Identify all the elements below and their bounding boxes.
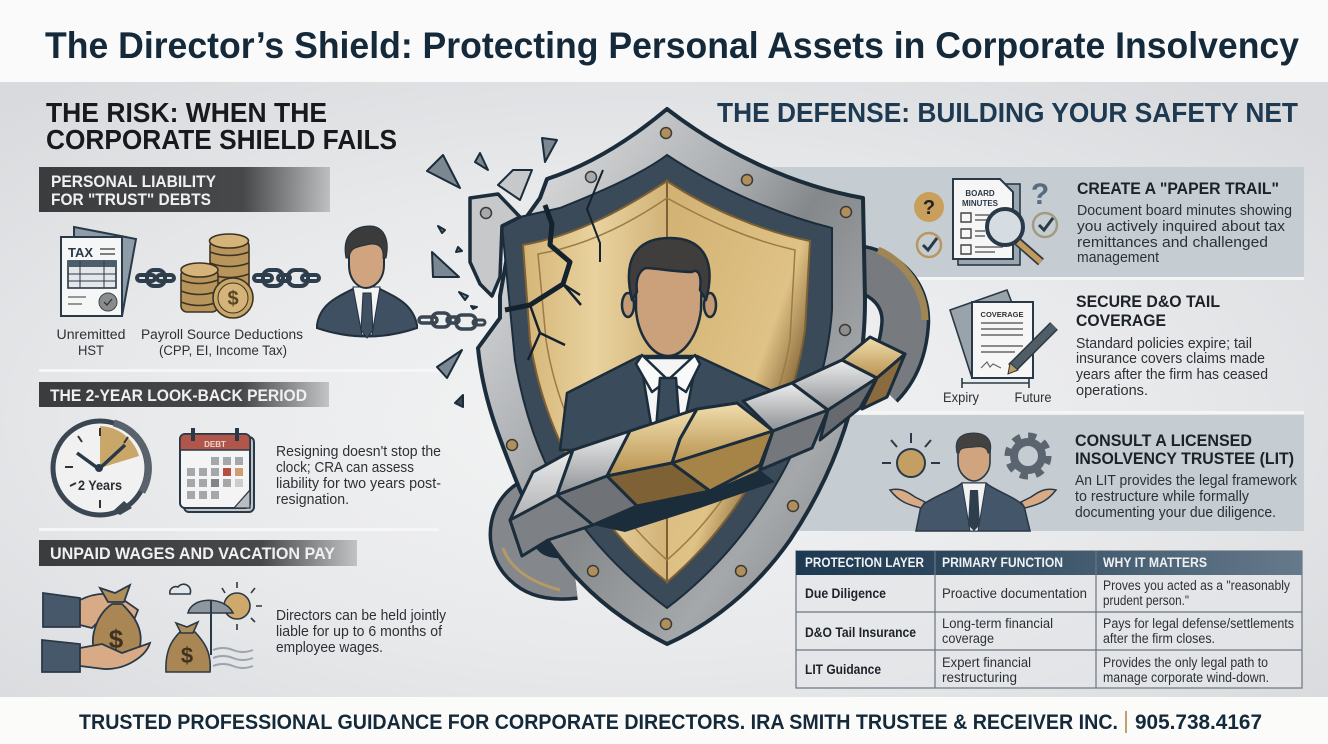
icon: board minutes with magnifier: BOARD	[965, 189, 995, 198]
panel: licensed insolvency trustee	[780, 415, 1304, 531]
heading: tail coverage: SECURE D&O TAIL	[1076, 293, 1220, 311]
text: directors	[276, 608, 447, 656]
label: unremitted HST: HST	[78, 343, 104, 358]
icon: tax document: TAX	[68, 245, 93, 260]
panel: the risk	[39, 97, 447, 672]
director in shield	[560, 238, 795, 450]
table row: D&O tail insurance: Pays for legal defense/settlements	[1103, 616, 1294, 631]
text: paper trail: you actively inquired about tax	[1077, 219, 1286, 235]
icon: tax document	[61, 227, 136, 316]
text: tail coverage: Standard policies expire; tail	[1076, 336, 1252, 352]
footer divider	[1125, 711, 1127, 733]
text: resigning: resignation.	[276, 492, 349, 508]
table row: D&O tail insurance: Long-term financial	[942, 616, 1053, 631]
heading: LIT	[1075, 432, 1294, 468]
icon: calendar	[180, 428, 254, 512]
table row: D&O tail insurance: coverage	[942, 631, 994, 646]
text: tail coverage: insurance covers claims made	[1076, 351, 1265, 367]
text: LIT: documenting your due diligence.	[1075, 505, 1276, 521]
icon: hands passing money bag: $	[109, 624, 124, 654]
label: unremitted HST	[56, 327, 126, 358]
text: resigning: clock; CRA can assess	[276, 460, 414, 476]
text: resigning: Resigning doesn't stop the	[276, 444, 441, 460]
title: The Director’s Shield: Protecting Personal Assets in Corporate Insolvency	[45, 25, 1299, 66]
table row: due diligence: Proactive documentation	[942, 586, 1087, 601]
table header: WHY IT MATTERS	[1103, 555, 1207, 570]
banner: personal liability	[39, 167, 330, 212]
table header: PROTECTION LAYER	[805, 555, 924, 570]
table row: LIT guidance: LIT Guidance	[805, 662, 881, 677]
icon: director figure	[317, 226, 417, 338]
table row: LIT guidance: Provides the only legal path to	[1103, 655, 1268, 670]
text: paper trail: Document board minutes showing	[1077, 203, 1292, 219]
heading: tail coverage	[1076, 293, 1220, 330]
banner: personal liability: PERSONAL LIABILITY	[51, 173, 216, 191]
table row: D&O tail insurance: after the firm closes.	[1103, 631, 1215, 646]
table header	[796, 551, 1302, 575]
icon: board minutes with magnifier: ?	[1031, 178, 1049, 211]
icon: board minutes with magnifier: ?	[923, 197, 935, 219]
table row: due diligence: Proves you acted as a "reasonably	[1103, 578, 1290, 593]
text: directors: liable for up to 6 months of	[276, 624, 443, 640]
icon: policy document and pen: COVERAGE	[981, 310, 1023, 319]
footer text: TRUSTED PROFESSIONAL GUIDANCE FOR CORPORATE DIRECTORS. IRA SMITH TRUSTEE & RECEIVER INC.	[79, 711, 1118, 734]
icon: hands passing money bag	[42, 585, 150, 672]
icon: chain link two	[254, 270, 319, 286]
table row: due diligence: prudent person."	[1103, 593, 1189, 608]
table header: PRIMARY FUNCTION	[942, 555, 1063, 570]
label: future: Future	[1014, 390, 1052, 405]
icon: coin stacks: $	[227, 288, 239, 310]
heading: LIT: INSOLVENCY TRUSTEE (LIT)	[1075, 450, 1294, 468]
table: protection layers	[796, 551, 1302, 688]
banner: look-back period: THE 2-YEAR LOOK-BACK PERIOD	[50, 387, 307, 405]
heading: paper trail: CREATE A "PAPER TRAIL"	[1077, 180, 1279, 198]
text: directors: employee wages.	[276, 640, 383, 656]
banner: look-back period	[39, 382, 329, 407]
footer band	[0, 697, 1328, 744]
heading: the defense: THE DEFENSE: BUILDING YOUR SAFETY NET	[717, 97, 1298, 128]
panel: the defense	[717, 97, 1304, 688]
icon: coin stacks	[181, 234, 253, 318]
shield: steel rim	[478, 109, 865, 644]
icon: trustee with sun and gear	[882, 433, 1056, 531]
banner: personal liability: FOR "TRUST" DEBTS	[51, 191, 211, 209]
heading: tail coverage: COVERAGE	[1076, 312, 1166, 330]
icon: chain link one	[137, 270, 174, 286]
banner: unpaid wages	[39, 540, 357, 566]
table row: D&O tail insurance	[805, 616, 1294, 646]
wrap: rear loop	[503, 250, 925, 590]
text: LIT	[1075, 473, 1298, 521]
icon: calendar: DEBT	[204, 440, 226, 449]
panel: tail coverage	[780, 290, 1304, 414]
heading: LIT: CONSULT A LICENSED	[1075, 432, 1252, 450]
text: paper trail: management	[1077, 250, 1159, 266]
table row: LIT guidance: manage corporate wind-down.	[1103, 670, 1269, 685]
shield: dark inner band	[502, 155, 832, 608]
text: directors: Directors can be held jointly	[276, 608, 447, 624]
footer phone: 905.738.4167	[1135, 711, 1262, 734]
table row: LIT guidance: restructuring	[942, 670, 1017, 685]
label: payroll source deductions: Payroll Source Deductions	[141, 327, 303, 342]
text: LIT: to restructure while formally	[1075, 489, 1250, 505]
text: resigning: liability for two years post-	[276, 476, 441, 492]
text: paper trail: remittances and challenged	[1077, 235, 1268, 251]
icon: clock	[53, 421, 148, 515]
icon: vacation pay bag and umbrella: $	[181, 643, 193, 668]
shield: rivets	[480, 128, 852, 630]
heading: the risk	[46, 97, 397, 155]
table row: LIT guidance	[805, 655, 1269, 685]
chain to broken shield	[419, 313, 485, 329]
panel: paper trail	[763, 167, 1304, 280]
table row: due diligence	[805, 578, 1290, 608]
wrap: front band	[510, 337, 905, 556]
shield: cracks	[505, 170, 603, 360]
label: unremitted HST: Unremitted	[56, 327, 126, 342]
icon: clock: 2 Years	[78, 477, 122, 493]
text: tail coverage: operations.	[1076, 383, 1148, 399]
table row: D&O tail insurance: D&O Tail Insurance	[805, 625, 916, 640]
text: paper trail	[1077, 203, 1292, 266]
banner: unpaid wages: UNPAID WAGES AND VACATION PAY	[50, 545, 335, 563]
text: tail coverage	[1076, 336, 1268, 399]
shield: broken chunk	[470, 194, 520, 296]
icon: vacation pay bag and umbrella	[166, 582, 262, 672]
central illustration: broken shield with director and wrap	[419, 109, 925, 644]
table row: LIT guidance: Expert financial	[942, 655, 1031, 670]
heading: the risk: CORPORATE SHIELD FAILS	[46, 124, 397, 155]
icon: board minutes with magnifier: MINUTES	[962, 199, 999, 208]
table row: due diligence: Due Diligence	[805, 586, 886, 601]
text: resigning	[276, 444, 441, 508]
heading: the risk: THE RISK: WHEN THE	[46, 97, 327, 128]
label: payroll source deductions: (CPP, EI, Income Tax)	[159, 343, 287, 358]
text: LIT: An LIT provides the legal framework	[1075, 473, 1298, 489]
label: payroll source deductions	[141, 327, 303, 358]
header band	[0, 0, 1328, 82]
icon: board minutes with magnifier	[914, 178, 1057, 265]
label: expiry: Expiry	[943, 390, 979, 405]
shield shards	[427, 138, 557, 407]
text: tail coverage: years after the firm has ceased	[1076, 367, 1268, 383]
shield: gold field	[523, 181, 810, 582]
icon: policy document and pen	[950, 290, 1054, 388]
